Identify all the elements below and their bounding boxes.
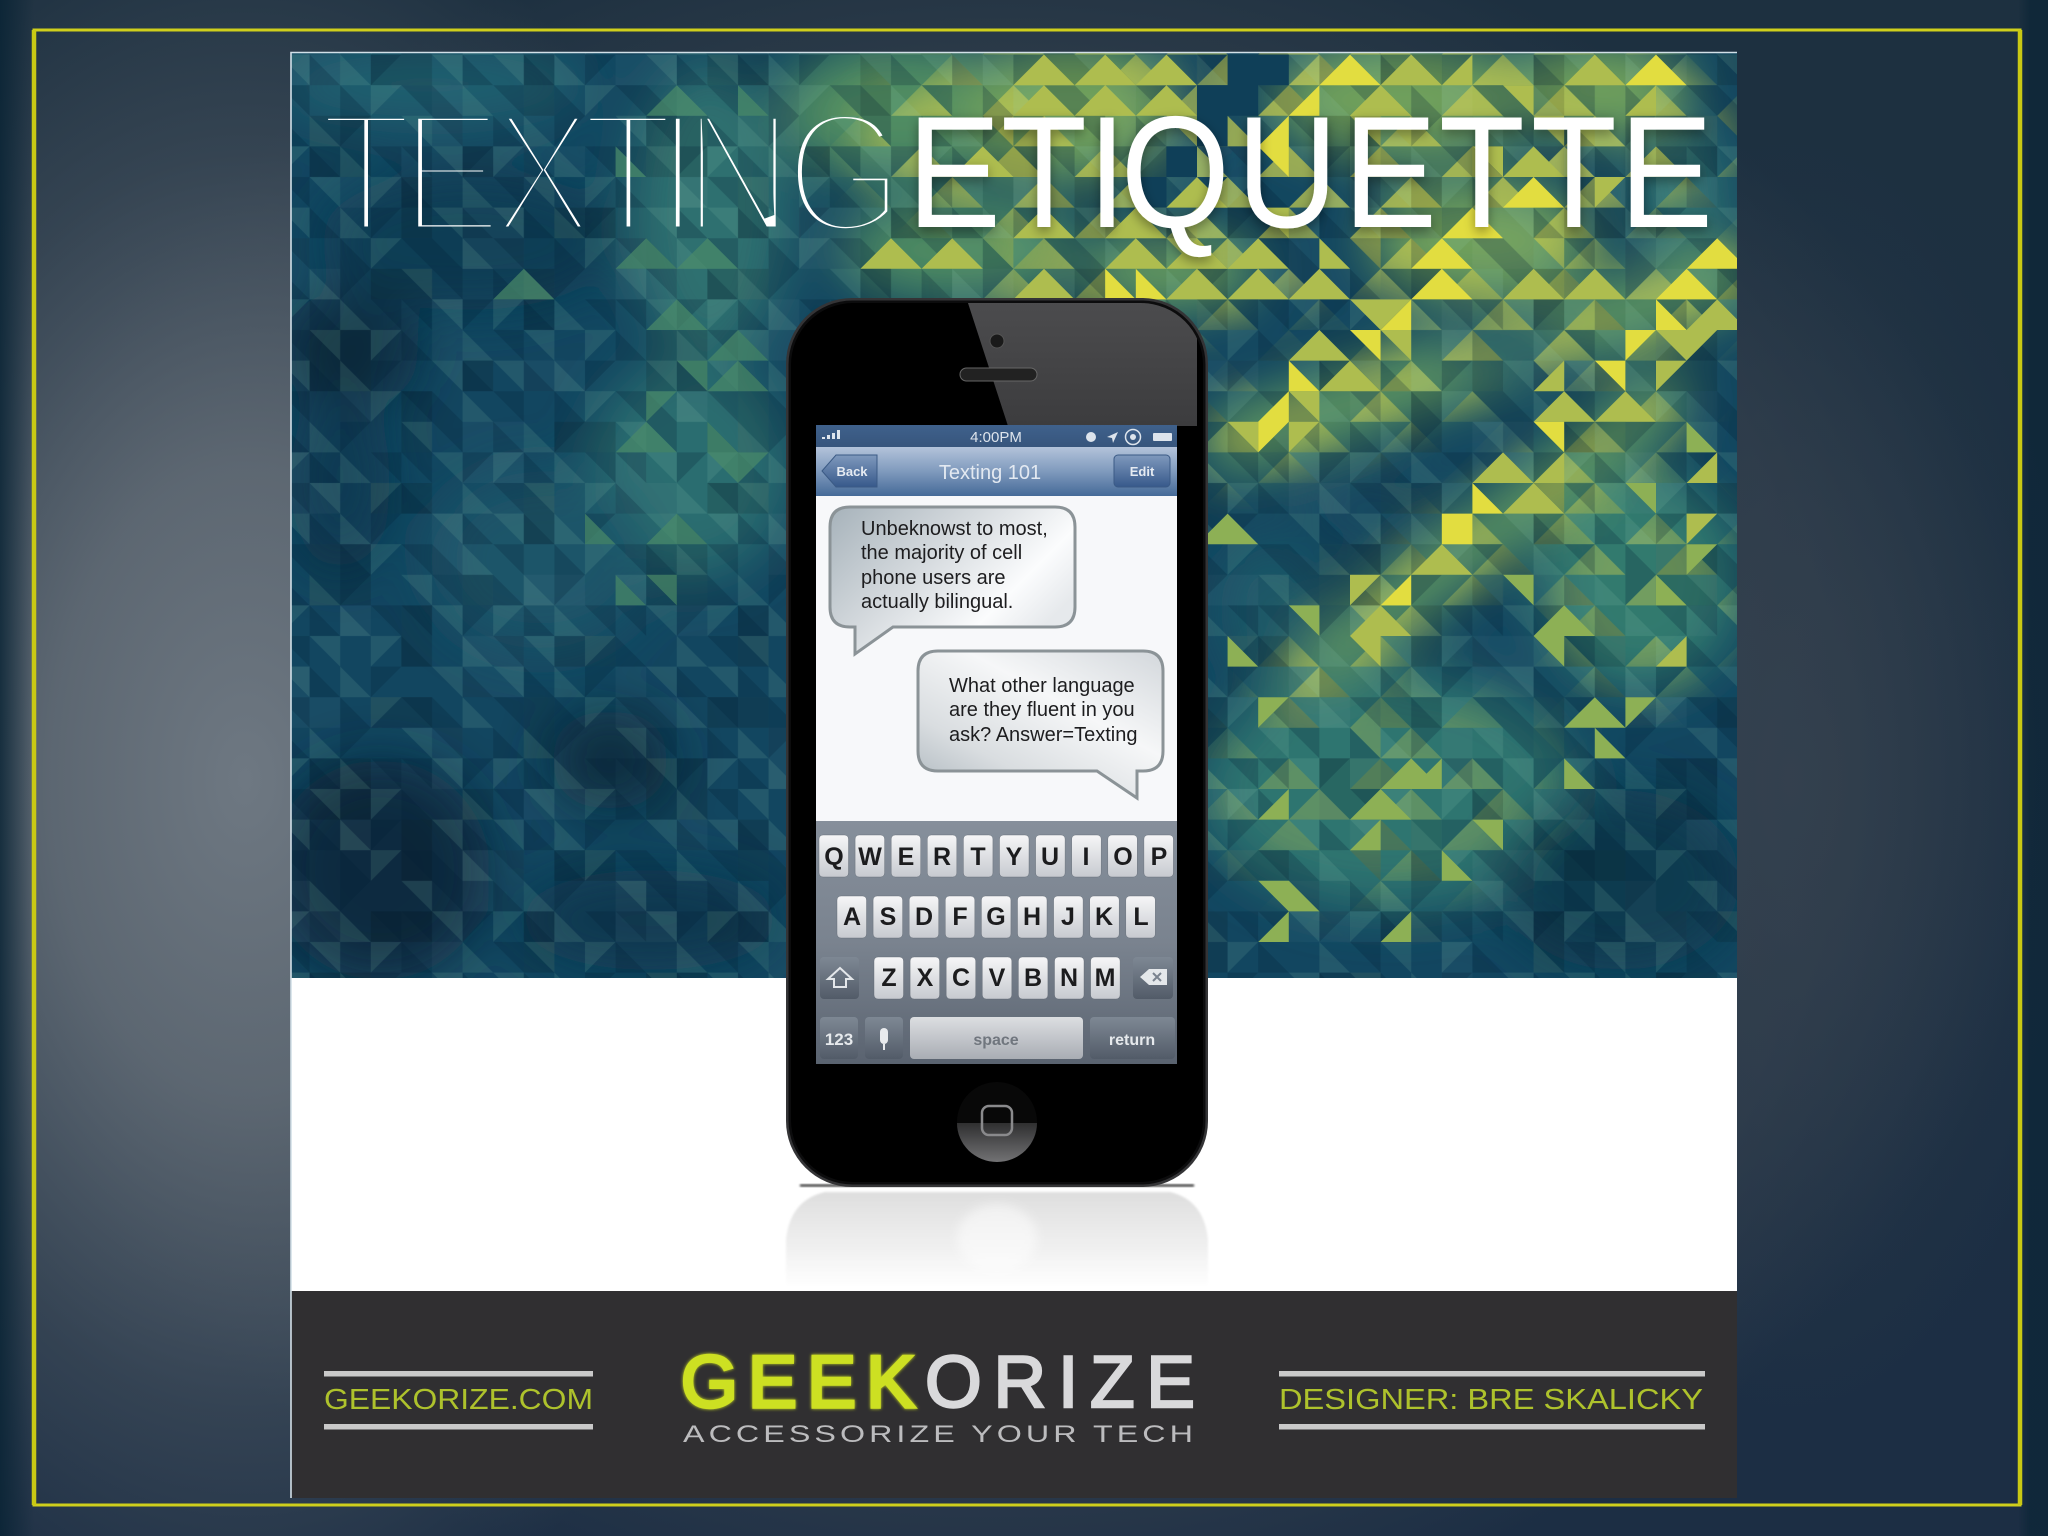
123 key: 123 xyxy=(825,1030,853,1049)
navigation bar: Back xyxy=(836,464,868,479)
phone shadow xyxy=(800,1184,1194,1187)
key letters: X xyxy=(917,964,934,992)
status bar: 4:00PM xyxy=(970,429,1022,446)
message area xyxy=(816,496,1177,821)
key letters: Y xyxy=(1006,843,1023,871)
footer: Geekorize logo xyxy=(681,1342,1197,1448)
teal-green triangles, left side xyxy=(493,85,769,605)
yellow-green triangles, centre and right xyxy=(1197,422,1717,942)
key letters: V xyxy=(989,964,1006,992)
key letters: O xyxy=(1113,843,1133,871)
footer: designer credit: DESIGNER: BRE SKALICKY xyxy=(1279,1384,1703,1416)
return key: return xyxy=(1109,1032,1155,1049)
key letters: R xyxy=(933,843,951,871)
navigation bar xyxy=(816,447,1177,496)
key letters: H xyxy=(1023,903,1041,931)
speech bubble: incoming: Unbeknowst to most, xyxy=(861,518,1048,540)
panel border lines xyxy=(291,52,1737,1498)
phone body xyxy=(786,298,1208,1187)
title: TEXTING thin: TEXTING xyxy=(319,75,904,270)
footer: Geekorize logo: ORIZE xyxy=(925,1342,1195,1423)
speech bubble: reply: are they fluent in you xyxy=(949,699,1135,721)
microphone key xyxy=(865,1017,903,1059)
dark cells xyxy=(1136,55,1289,208)
key letters: D xyxy=(915,903,933,931)
key letters: L xyxy=(1133,903,1149,931)
key letters: Z xyxy=(881,964,897,992)
key letters: N xyxy=(1060,964,1078,992)
key letters: J xyxy=(1061,903,1075,931)
key letters: T xyxy=(970,843,986,871)
key letters: F xyxy=(952,903,968,931)
camera xyxy=(990,334,1004,348)
key letters: K xyxy=(1095,903,1113,931)
footer: website xyxy=(324,1371,593,1430)
title xyxy=(328,113,1710,268)
status bar xyxy=(816,425,1177,447)
title: ETIQUETTE: ETIQUETTE xyxy=(907,83,1713,261)
speech bubble: incoming xyxy=(830,507,1075,654)
space key: space xyxy=(973,1032,1019,1049)
keyboard row 1 xyxy=(819,835,1173,877)
phone xyxy=(786,298,1208,1187)
speech bubble: reply xyxy=(918,651,1163,798)
speech bubble: incoming: the majority of cell xyxy=(861,542,1022,564)
navigation bar: Texting 101 xyxy=(939,462,1041,484)
footer: designer credit xyxy=(1279,1371,1705,1430)
key letters: S xyxy=(880,903,896,931)
key letters: E xyxy=(898,843,914,871)
speech bubble: reply: ask? Answer=Texting xyxy=(949,724,1137,746)
glass glare xyxy=(967,300,1197,426)
return key xyxy=(1090,1017,1175,1059)
speech bubble: incoming: phone users are xyxy=(861,567,1006,589)
key letters: A xyxy=(843,903,861,931)
key letters: P xyxy=(1151,843,1167,871)
key letters: Q xyxy=(824,843,844,871)
phone reflection xyxy=(786,1192,1208,1288)
footer band xyxy=(291,1291,1737,1498)
key letters xyxy=(824,843,1167,992)
footer: Geekorize logo: ACCESSORIZE YOUR TECH xyxy=(683,1421,1197,1448)
key letters: W xyxy=(858,843,882,871)
footer: Geekorize logo: GEEK xyxy=(681,1342,915,1423)
keyboard row 2 xyxy=(837,896,1155,938)
key letters: U xyxy=(1041,843,1059,871)
footer: website: GEEKORIZE.COM xyxy=(324,1384,593,1416)
navigation bar: Edit xyxy=(1130,464,1155,479)
123 key xyxy=(820,1017,858,1059)
delete key xyxy=(1133,957,1173,999)
white floor area xyxy=(291,978,1737,1291)
home button xyxy=(957,1082,1037,1162)
key letters: M xyxy=(1095,964,1115,992)
key letters: G xyxy=(986,903,1006,931)
panel: infographic poster xyxy=(270,40,1748,1498)
speaker xyxy=(960,368,1037,381)
key letters: B xyxy=(1024,964,1042,992)
panel: geometric triangle background xyxy=(270,40,1748,982)
bright yellow triangles xyxy=(1105,55,1748,605)
space key xyxy=(910,1017,1083,1059)
key letters: I xyxy=(1083,843,1089,871)
keyboard xyxy=(816,821,1177,1064)
speech bubble: reply: What other language xyxy=(949,675,1135,697)
phone screen xyxy=(816,425,1177,1064)
shift key xyxy=(820,957,859,999)
key letters: C xyxy=(952,964,970,992)
speech bubble: incoming: actually bilingual. xyxy=(861,591,1013,613)
keyboard row 3 xyxy=(874,957,1120,999)
